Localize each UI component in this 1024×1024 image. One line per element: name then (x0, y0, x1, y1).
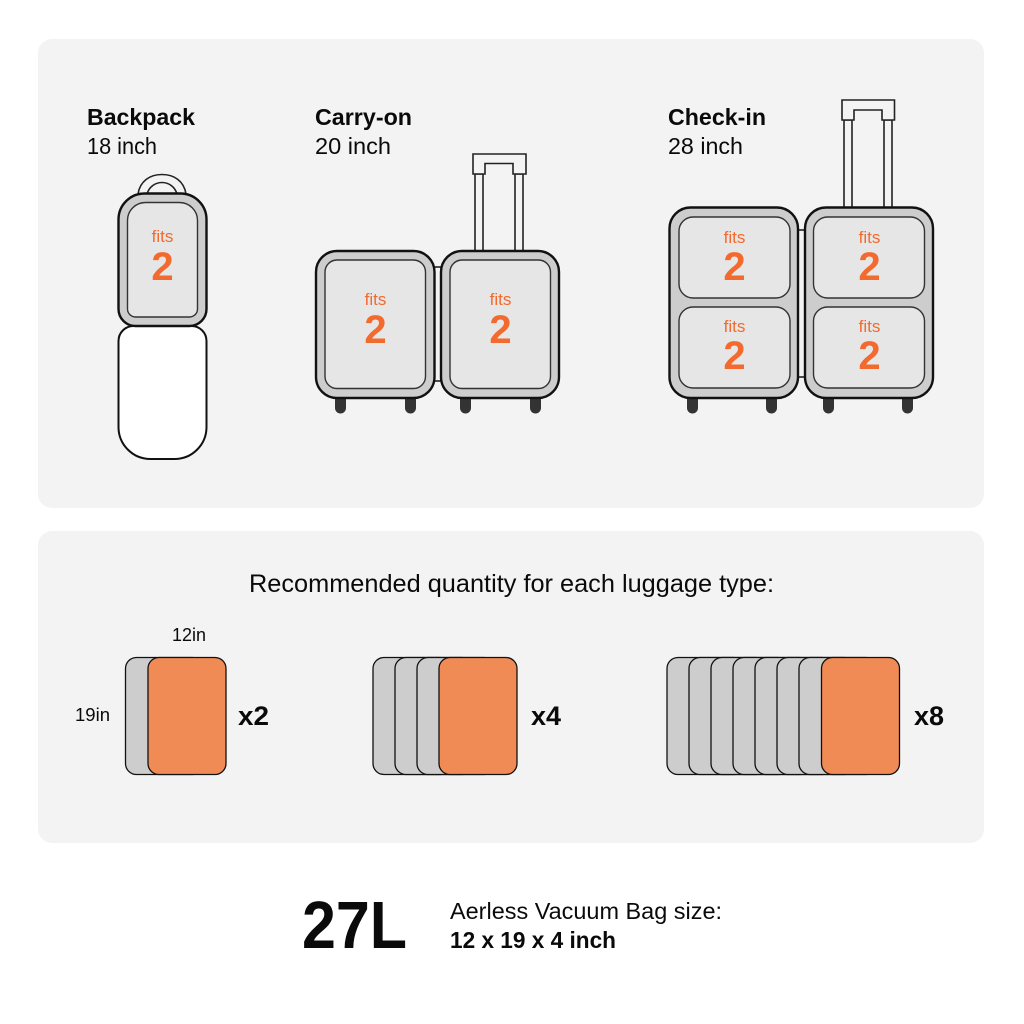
heading: check-in (668, 104, 766, 159)
panel: recommended quantity (38, 531, 984, 843)
icon: check-in suitcases: 2 (723, 334, 746, 378)
icon: carry-on suitcases: 2 (364, 308, 387, 352)
bags x8 (667, 658, 900, 774)
icon: carry-on suitcases (316, 154, 559, 414)
icon: carry-on suitcases: fits (490, 290, 511, 309)
panel: luggage types (38, 39, 984, 508)
heading: backpack: Backpack (87, 104, 196, 130)
icon: check-in suitcases: fits (724, 228, 745, 247)
icon: backpack: fits (152, 227, 173, 246)
icon: check-in suitcases: fits (859, 317, 880, 336)
icon: check-in suitcases: fits (724, 317, 745, 336)
icon: check-in suitcases: fits (859, 228, 880, 247)
heading: check-in: Check-in (668, 104, 766, 130)
icon: check-in suitcases: 2 (858, 245, 881, 289)
bag size caption: Aerless Vacuum Bag size: (450, 898, 722, 924)
heading: recommended quantity: Recommended quantity for each luggage type: (249, 570, 774, 598)
quantity x4: x4 (531, 701, 561, 731)
volume figure: 27L (302, 888, 407, 963)
heading: backpack (87, 104, 196, 159)
heading: backpack: 18 inch (87, 133, 157, 159)
heading: carry-on: 20 inch (315, 133, 391, 159)
heading: carry-on: Carry-on (315, 104, 412, 130)
icon: carry-on suitcases: fits (365, 290, 386, 309)
heading: carry-on (315, 104, 412, 159)
bag size caption (450, 898, 722, 953)
dimension label: height: 19in (75, 704, 110, 725)
icon: check-in suitcases: 2 (858, 334, 881, 378)
icon: carry-on suitcases: 2 (489, 308, 512, 352)
icon: check-in suitcases: 2 (723, 245, 746, 289)
icon: backpack (118, 174, 206, 459)
bags x2 (126, 658, 226, 774)
icon: backpack: 2 (151, 245, 174, 289)
heading: check-in: 28 inch (668, 133, 743, 159)
bags x4 (373, 658, 517, 774)
quantity x2: x2 (238, 701, 269, 731)
icon: check-in suitcases (670, 100, 933, 414)
dimension label: width: 12in (172, 624, 206, 645)
quantity x8: x8 (914, 701, 944, 731)
bag size caption: 12 x 19 x 4 inch (450, 927, 616, 953)
